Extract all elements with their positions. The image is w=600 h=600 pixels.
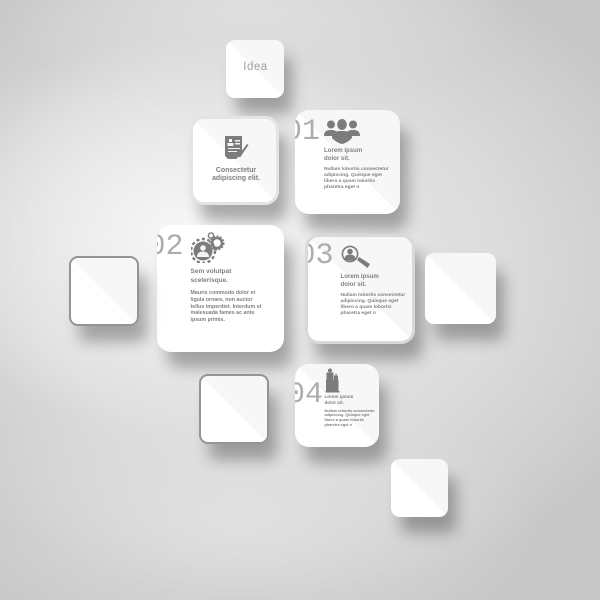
heading: lorem ipsum: dolor sit.	[324, 155, 350, 162]
text block	[190, 290, 262, 323]
heading: lorem ipsum: Lorem ipsum	[324, 147, 362, 154]
text block	[340, 292, 406, 316]
text block: adipiscing. Quisque eget	[324, 413, 369, 417]
label: idea: Idea	[243, 61, 268, 73]
card: empty bottom right	[391, 459, 448, 517]
text block: Nullam lobortis consectetur	[324, 408, 375, 412]
heading: lorem ipsum: Lorem ipsum	[340, 273, 379, 280]
card: 04	[295, 364, 379, 447]
card: 01	[295, 110, 400, 214]
text block: ligula ornare, non auctor	[190, 297, 253, 303]
icon: people group	[324, 119, 360, 144]
text block: pharetra eget n	[324, 423, 352, 427]
text block	[324, 408, 375, 427]
icon: podium with speaker	[326, 368, 340, 392]
heading: lorem ipsum	[324, 147, 362, 162]
heading: lorem ipsum	[324, 394, 354, 405]
text block: adipiscing. Quisque eget	[324, 173, 382, 178]
card: 02	[157, 225, 284, 352]
card: consectetur	[190, 116, 279, 205]
text block: ipsum primis.	[190, 317, 225, 323]
text block: libero a quam lobortis	[340, 305, 392, 310]
text block: pharetra eget n	[340, 311, 376, 316]
heading: sem volutpat: scelerisque.	[190, 276, 228, 284]
text block: pharetra eget n	[324, 185, 359, 190]
heading: lorem ipsum: dolor sit.	[340, 281, 366, 288]
icon: gears with person	[191, 232, 225, 263]
card: empty lower left	[199, 374, 269, 444]
heading: consectetur: Consectetur	[216, 166, 256, 174]
icon: magnifier with person	[342, 246, 370, 268]
heading: sem volutpat	[190, 268, 232, 284]
text block: adipiscing. Quisque eget	[340, 299, 398, 304]
card: empty right	[425, 253, 496, 324]
text block: malesuada fames ac ante	[190, 310, 254, 316]
card: idea	[226, 40, 284, 98]
text block: Nullam lobortis consectetur	[324, 167, 389, 172]
card: 03	[305, 234, 415, 344]
text block: libero a quam lobortis	[324, 179, 375, 184]
text block: Nullam lobortis consectetur	[340, 292, 405, 298]
heading: consectetur	[212, 166, 260, 182]
heading: sem volutpat: Sem volutpat	[190, 268, 231, 275]
heading: lorem ipsum	[340, 273, 379, 288]
card: empty left	[69, 256, 139, 326]
heading: lorem ipsum: Lorem ipsum	[324, 394, 353, 399]
text block: libero a quam lobortis	[324, 418, 364, 422]
heading: consectetur: adipiscing elit.	[212, 175, 260, 182]
text block: tellus imperdiet. Interdum et	[190, 304, 261, 310]
heading: lorem ipsum: dolor sit.	[324, 400, 344, 405]
text block: Mauris commodo dolor et	[190, 290, 255, 296]
text block	[324, 166, 389, 190]
icon: document with pen	[225, 136, 248, 159]
